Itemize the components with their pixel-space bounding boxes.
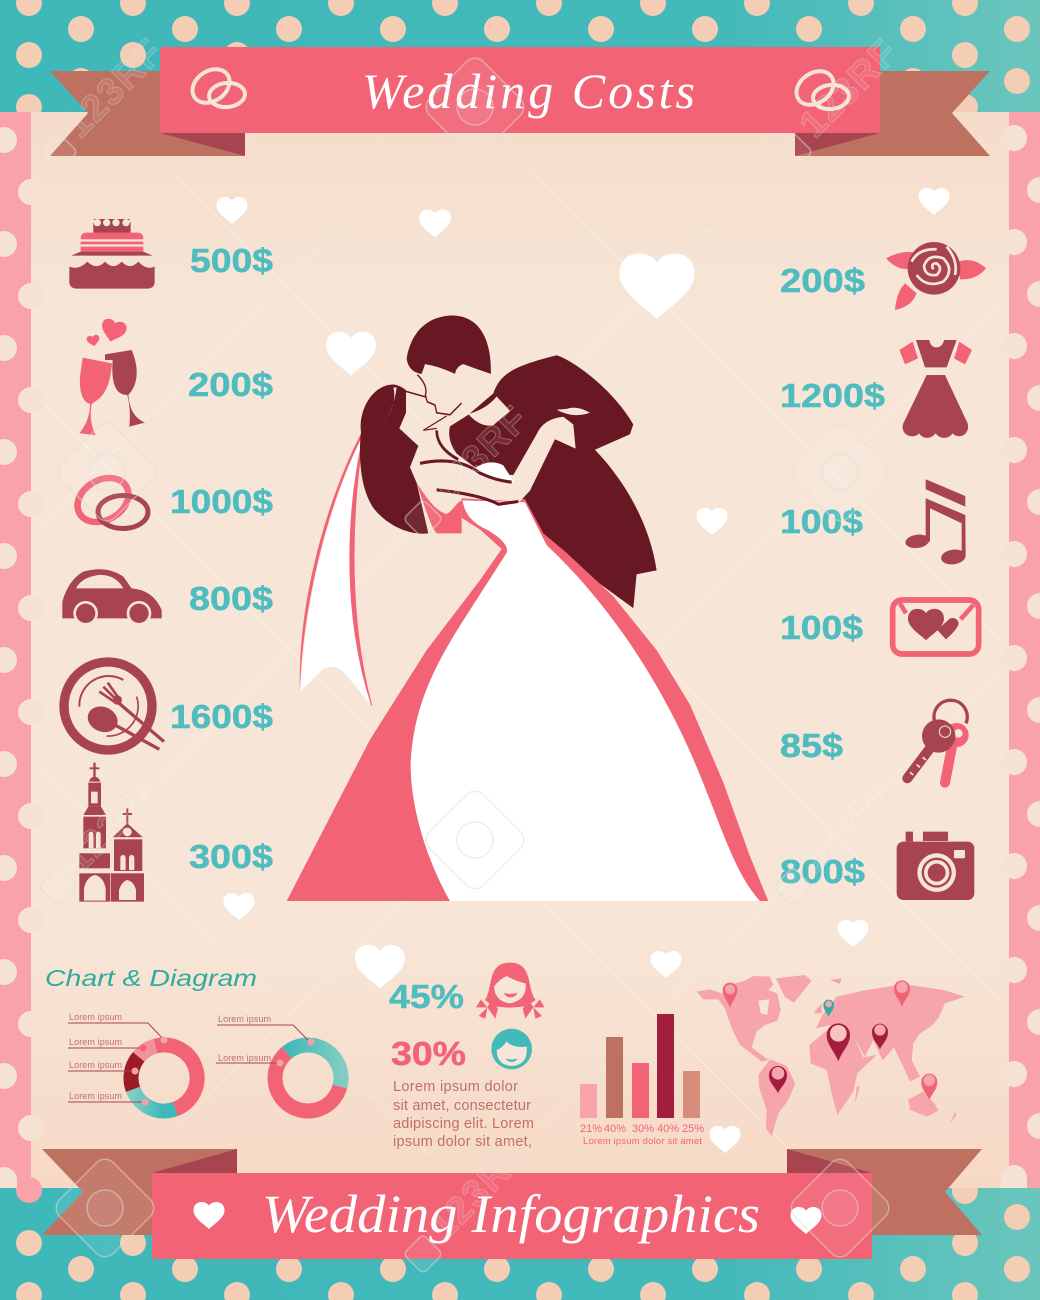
icon: cake (69, 219, 155, 289)
right cost column (780, 242, 986, 900)
bride hairband (378, 388, 397, 430)
groom suit (449, 355, 657, 608)
donut left labels: Lorem ipsum (69, 1060, 122, 1070)
ribbon left fold (160, 133, 245, 156)
price: music: 100$ (780, 503, 863, 540)
stock photo watermarks: 123RF (57, 32, 171, 146)
paragraph: ipsum dolor sit amet, (393, 1134, 532, 1150)
icon: music notes (905, 479, 967, 566)
bride neckline (417, 483, 462, 533)
icon: keys (907, 700, 969, 783)
bar chart (580, 1014, 704, 1147)
icon: plate and cutlery (64, 662, 164, 750)
footer band (152, 1173, 872, 1259)
price: dress: 1200$ (780, 377, 885, 414)
price: plate: 1600$ (170, 698, 273, 735)
footer ribbon (42, 1149, 982, 1259)
footer left fold (152, 1149, 237, 1173)
icon: heart right (790, 1207, 822, 1234)
ribbon left tail (50, 71, 245, 156)
bride arm (418, 417, 576, 502)
sleeve cuff (557, 408, 590, 415)
donut right leader lines (216, 1025, 310, 1063)
stat 45 percent: 45% (389, 978, 464, 1015)
price: car: 800$ (189, 580, 273, 617)
price: champagne: 200$ (188, 366, 273, 403)
donut chart right (275, 1045, 341, 1111)
footer right tail (787, 1149, 982, 1235)
donut right markers (276, 1038, 314, 1066)
icon: car (62, 569, 162, 626)
donut left markers (132, 1036, 168, 1106)
stock photo watermarks: 123RF (792, 32, 906, 146)
bride dress pink layer (287, 496, 768, 901)
icon: rose (886, 242, 986, 310)
face profiles (406, 375, 462, 415)
price: invitation: 100$ (780, 609, 863, 646)
bride arm outline (420, 430, 518, 504)
pins (723, 980, 937, 1100)
price: rose: 200$ (780, 262, 865, 299)
paragraph: sit amet, consectetur (393, 1098, 531, 1114)
price: rings: 1000$ (170, 483, 273, 520)
donut chart left (131, 1045, 197, 1111)
icon: envelope with hearts (893, 600, 979, 654)
stat 30 percent: 30% (391, 1035, 466, 1072)
background: teal polka band bottom (0, 1178, 1040, 1300)
footer text: Wedding Infographics (262, 1184, 760, 1244)
stock photo watermarks (38, 32, 906, 1274)
bar chart: 21% (580, 1123, 602, 1135)
ribbon band (160, 47, 880, 133)
paragraph (393, 1079, 534, 1150)
icon: wedding rings (70, 469, 148, 531)
right pink polka strip (1001, 112, 1040, 1188)
donut right labels: Lorem ipsum (218, 1053, 271, 1063)
chart heading: Chart & Diagram (45, 965, 257, 991)
stock photo watermarks: 123RF (422, 1134, 536, 1248)
bar chart: 30% (632, 1123, 654, 1135)
title text: Wedding Costs (362, 63, 695, 119)
bar chart: Lorem ipsum dolor sit amet (583, 1136, 702, 1147)
icon: dress (899, 340, 972, 438)
title ribbon (50, 47, 990, 156)
donut left labels: Lorem ipsum (69, 1012, 122, 1022)
stock photo watermarks: 123RF (422, 399, 536, 513)
background diamond lines (40, 170, 1000, 1160)
paragraph: adipiscing elit. Lorem (393, 1116, 534, 1132)
bar chart: 25% (682, 1123, 704, 1135)
section: chart and diagram (45, 965, 341, 1111)
illustration: bride and groom (287, 316, 768, 901)
price: keys: 85$ (780, 727, 843, 764)
continents (697, 975, 965, 1137)
paragraph: Lorem ipsum dolor (393, 1079, 518, 1095)
footer right fold (787, 1149, 872, 1173)
icon: heart left (194, 1202, 224, 1229)
icon: church (79, 763, 144, 902)
veil (300, 432, 372, 705)
donut left leader lines (68, 1023, 164, 1102)
icon: rings left (186, 62, 246, 110)
section: gender stats (389, 963, 545, 1150)
donut left labels: Lorem ipsum (69, 1091, 122, 1101)
icon: camera (897, 832, 974, 900)
footer left tail (42, 1149, 237, 1235)
bride dress white layer (411, 500, 760, 901)
donut left labels: Lorem ipsum (69, 1037, 122, 1047)
left cost column (62, 219, 273, 902)
donut right labels: Lorem ipsum (218, 1014, 271, 1024)
stock photo watermarks: 123RF (57, 767, 171, 881)
ribbon right tail (795, 71, 990, 156)
background: teal polka band top (0, 0, 1040, 120)
Hudson Bay (758, 999, 769, 1015)
donut right labels (218, 1014, 271, 1063)
groom hair (407, 316, 491, 374)
price: church: 300$ (189, 838, 273, 875)
stock photo watermarks: 123RF (792, 767, 906, 881)
icon: champagne glasses (79, 317, 145, 435)
icon: rings right (790, 64, 850, 112)
price: cake: 500$ (190, 242, 273, 279)
bar chart: 40% (657, 1123, 679, 1135)
groom shirt collar (468, 396, 510, 426)
donut left labels (69, 1012, 122, 1101)
icon: girl (476, 963, 545, 1019)
floating white hearts (216, 188, 950, 1153)
ribbon right fold (795, 133, 880, 156)
world map with pins (697, 975, 965, 1137)
bar chart: 40% (604, 1123, 626, 1135)
icon: boy (491, 1029, 532, 1069)
bride hair (360, 385, 428, 534)
bride bodice top (472, 462, 514, 482)
left pink polka strip (0, 112, 44, 1203)
price: camera: 800$ (780, 853, 865, 890)
